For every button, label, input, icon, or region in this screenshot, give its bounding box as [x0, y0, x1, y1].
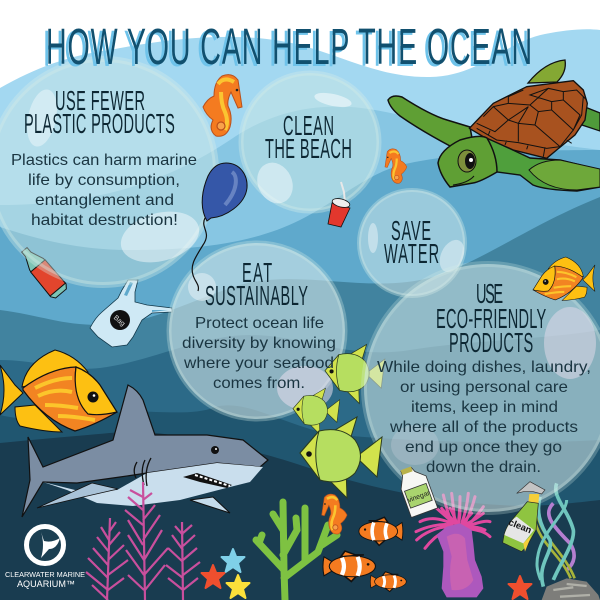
text: use eco-friendly products: USE — [476, 278, 503, 309]
text: use eco-friendly products — [377, 278, 591, 476]
bubble: clean the beach — [241, 73, 379, 211]
text: use eco-friendly products: where all of the products — [389, 419, 578, 436]
icon: sea turtle — [388, 60, 600, 191]
logo: Clearwater Marine Aquarium: CLEARWATER MARINE — [5, 570, 85, 579]
text: eat sustainably: diversity by knowing — [182, 335, 336, 352]
text: save water: WATER — [384, 238, 439, 269]
icon: large green fish — [300, 417, 382, 498]
text: use fewer plastic products — [11, 85, 197, 229]
green coral — [256, 502, 337, 600]
text: use fewer plastic products: Plastics can harm marine — [11, 152, 197, 169]
icon: vinegar bottle: vinegar — [407, 490, 431, 504]
plastic bag: Bag — [112, 314, 126, 328]
bubble: save water — [359, 190, 469, 296]
plastic bottle — [17, 243, 69, 300]
text: use eco-friendly products: or using personal care — [400, 379, 568, 396]
icon: yellow fish small — [533, 257, 595, 300]
text: eat sustainably: EAT — [242, 257, 272, 288]
bubble: use eco-friendly products — [364, 264, 600, 512]
text: eat sustainably: where your seafood — [183, 355, 334, 372]
logo: Clearwater Marine Aquarium — [5, 526, 85, 589]
bubble: use fewer plastic products — [0, 59, 216, 285]
text: use fewer plastic products: entanglement and — [35, 192, 174, 209]
text: use fewer plastic products: life by consumption, — [28, 172, 180, 189]
icon: rock — [542, 578, 600, 600]
text: use eco-friendly products: end up once they go — [405, 439, 562, 456]
seaweed — [534, 483, 575, 587]
icon: seahorse near coral — [322, 494, 347, 534]
text: clean the beach: CLEAN — [283, 110, 334, 141]
text: use eco-friendly products: While doing dishes, laundry, — [377, 359, 591, 376]
text: clean the beach: THE BEACH — [265, 133, 352, 164]
title: HOW YOU CAN HELP THE OCEAN — [46, 18, 532, 75]
title: HOW YOU CAN HELP THE OCEAN — [43, 20, 529, 77]
text: save water: SAVE — [391, 215, 431, 246]
text: eat sustainably: SUSTAINABLY — [205, 280, 308, 311]
clownfish group — [323, 517, 406, 592]
pink sea plants — [86, 482, 200, 600]
icon: clean spray bottle — [503, 482, 545, 552]
bubble: eat sustainably — [169, 243, 345, 419]
text: use eco-friendly products: down the drain. — [426, 459, 541, 476]
icon: cup with straw — [328, 182, 351, 227]
anemone — [416, 493, 490, 597]
text: use eco-friendly products: ECO-FRIENDLY — [436, 303, 546, 334]
icon: balloon — [192, 163, 247, 291]
icon: yellow fish large — [0, 350, 117, 432]
icon: vinegar bottle — [395, 463, 438, 517]
text: eat sustainably: comes from. — [213, 375, 305, 392]
text: use fewer plastic products: PLASTIC PRODUCTS — [24, 108, 175, 139]
starfish group — [202, 549, 532, 599]
icon: small seahorse — [385, 149, 407, 183]
text: eat sustainably: Protect ocean life — [195, 315, 324, 332]
logo: Clearwater Marine Aquarium: AQUARIUM™ — [17, 579, 75, 589]
text: use eco-friendly products: items, keep in mind — [411, 399, 558, 416]
icon: shark — [22, 385, 268, 517]
icon: large seahorse — [203, 75, 242, 136]
text: clean the beach — [265, 110, 352, 164]
text: use eco-friendly products: PRODUCTS — [449, 327, 533, 358]
text: save water — [384, 215, 439, 269]
icon: clean spray bottle: clean — [507, 517, 533, 535]
text: use fewer plastic products: USE FEWER — [55, 85, 145, 116]
text: use fewer plastic products: habitat destruction! — [31, 212, 178, 229]
green fish pair — [293, 344, 385, 434]
plastic bag — [90, 280, 172, 347]
text: eat sustainably — [182, 257, 336, 392]
